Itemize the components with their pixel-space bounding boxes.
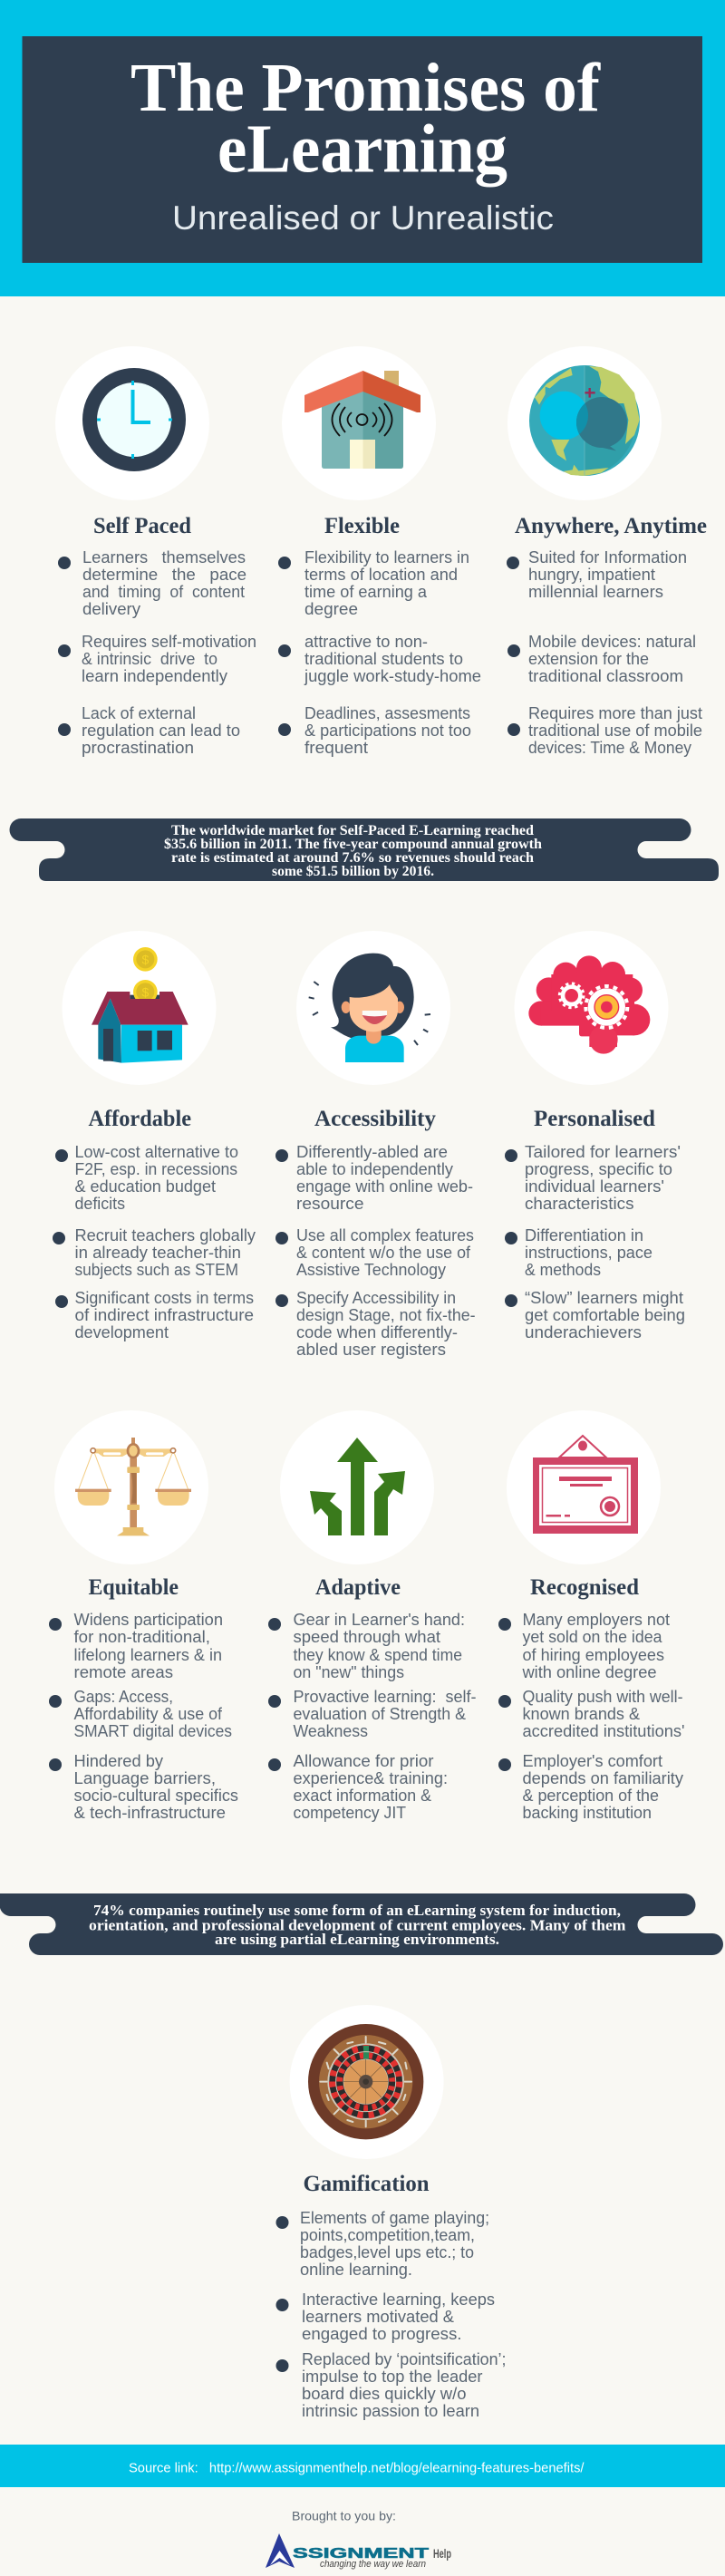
bullets: personalised: characteristics — [525, 1195, 634, 1213]
panel: accessibility — [276, 931, 475, 1359]
bullets: flexible: traditional students to — [304, 650, 463, 668]
bullets: self paced: & intrinsic drive to — [82, 650, 218, 668]
bullets: accessibility: & content w/o the use of — [296, 1244, 471, 1262]
heading: flexible: Flexible — [324, 514, 400, 538]
bullets: recognised: yet sold on the idea — [522, 1628, 662, 1646]
bullets: gamification: learners motivated & — [302, 2308, 454, 2326]
bullets: anywhere anytime: extension for the — [528, 650, 649, 668]
title panel — [22, 36, 702, 263]
heading: anywhere anytime: Anywhere, Anytime — [515, 514, 707, 538]
bullets: personalised — [505, 1143, 685, 1341]
bullets: accessibility: Use all complex features — [296, 1226, 474, 1244]
bullets: affordable: development — [74, 1323, 169, 1341]
icon: smiling woman — [296, 931, 450, 1085]
bullets: gamification: badges,level ups etc.; to — [300, 2243, 474, 2261]
bullets: equitable: Language barriers, — [74, 1769, 216, 1787]
icon: brain with gears — [515, 931, 669, 1085]
bullets: self paced: learn independently — [82, 667, 227, 685]
bullets: personalised: individual learners' — [525, 1177, 664, 1196]
bullets: personalised: instructions, pace — [525, 1244, 652, 1262]
bullets: adaptive: exact information & — [294, 1787, 431, 1805]
bullets: equitable: SMART digital devices — [74, 1722, 232, 1740]
bullets: affordable: subjects such as STEM — [74, 1261, 238, 1279]
bullets: affordable: in already teacher-thin — [74, 1244, 241, 1262]
bullets: gamification: Replaced by ‘pointsification’; — [302, 2350, 506, 2368]
credit text: Brought to you by: — [292, 2509, 396, 2523]
heading: accessibility: Accessibility — [314, 1107, 436, 1131]
bullets: gamification: engaged to progress. — [302, 2325, 462, 2343]
bullets: adaptive: Weakness — [294, 1722, 368, 1740]
bullets: recognised: accredited institutions' — [522, 1722, 685, 1740]
heading: self paced: Self Paced — [93, 514, 191, 538]
bullets: equitable: Hindered by — [74, 1752, 163, 1770]
bullets: affordable: of indirect infrastructure — [74, 1306, 254, 1324]
bullets: accessibility: able to independently — [296, 1160, 453, 1178]
icon: balance scales — [54, 1410, 208, 1564]
bullets: affordable — [53, 1143, 256, 1341]
callout banner: company usage: 74% companies routinely use some form of an eLearning system for induction, — [93, 1902, 621, 1919]
bullets: adaptive: competency JIT — [294, 1804, 406, 1822]
callout banner: market figures — [9, 818, 719, 881]
callout banner: company usage: are using partial eLearning environments. — [215, 1931, 499, 1948]
bullets: self paced: and timing of content — [82, 583, 245, 601]
logo: assignment help — [266, 2533, 451, 2570]
icon: three green arrows — [280, 1410, 434, 1564]
bullets: accessibility: Differently-abled are — [296, 1143, 448, 1161]
bullets: self paced: Requires self-motivation — [82, 633, 256, 651]
bullets: recognised: backing institution — [522, 1804, 652, 1822]
callout banner: market figures: rate is estimated at around 7.6% so revenues should reach — [171, 850, 534, 866]
panel: recognised — [498, 1410, 685, 1822]
panel: gamification — [276, 2005, 506, 2420]
bullets: recognised: Many employers not — [522, 1611, 670, 1629]
bullets: recognised: known brands & — [522, 1705, 640, 1723]
panel: equitable — [49, 1410, 238, 1822]
bullets: gamification — [276, 2209, 506, 2420]
bullets: self paced: Learners themselves — [82, 548, 246, 567]
bullets: equitable: remote areas — [74, 1663, 173, 1681]
bullets: affordable: deficits — [74, 1195, 125, 1213]
bullets: gamification: intrinsic passion to learn — [302, 2402, 479, 2420]
heading: equitable: Equitable — [89, 1575, 179, 1600]
bullets: recognised — [498, 1611, 685, 1822]
bullets: personalised: “Slow” learners might — [525, 1289, 683, 1307]
bullets: self paced: delivery — [82, 600, 140, 618]
bullets: anywhere anytime: Mobile devices: natural — [528, 633, 696, 651]
bullets: accessibility — [276, 1143, 475, 1359]
bullets: equitable: Affordability & use of — [74, 1705, 223, 1723]
bullets: affordable: Recruit teachers globally — [74, 1226, 256, 1244]
bullets: recognised: Quality push with well- — [522, 1688, 683, 1706]
bullets: flexible: time of earning a — [304, 583, 428, 601]
bullets: accessibility: code when differently- — [296, 1323, 458, 1341]
icon: piggy bank house with coins — [62, 931, 216, 1085]
bullets: recognised: of hiring employees — [522, 1646, 664, 1664]
bullets: flexible: degree — [304, 600, 358, 618]
bullets: adaptive: on "new" things — [294, 1663, 404, 1681]
bullets: accessibility: abled user registers — [296, 1341, 446, 1359]
bullets: self paced: determine the pace — [82, 566, 246, 584]
title: eLearning — [218, 111, 508, 187]
bullets: accessibility: Specify Accessibility in — [296, 1289, 456, 1307]
heading: recognised: Recognised — [530, 1575, 639, 1600]
bullets: anywhere anytime: traditional classroom — [528, 667, 683, 685]
bullets: flexible: Deadlines, assesments — [304, 704, 470, 722]
heading: gamification: Gamification — [303, 2172, 430, 2196]
bullets: personalised: & methods — [525, 1261, 601, 1279]
bullets: equitable — [49, 1611, 238, 1822]
bullets: personalised: progress, specific to — [525, 1160, 672, 1178]
bullets: flexible: juggle work-study-home — [304, 667, 481, 685]
header band — [0, 0, 725, 296]
bullets: gamification: board dies quickly w/o — [302, 2385, 466, 2403]
bullets: adaptive: Allowance for prior — [294, 1752, 434, 1770]
title: The Promises of — [130, 50, 602, 126]
callout banner: market figures: $35.6 billion in 2011. The five-year compound annual growth — [164, 837, 542, 852]
icon: roulette wheel — [290, 2005, 444, 2159]
bullets: accessibility: resource — [296, 1195, 364, 1213]
icon: piggy bank house with coins: $ — [141, 952, 149, 966]
bullets: adaptive: evaluation of Strength & — [294, 1705, 466, 1723]
bullets: gamification: online learning. — [300, 2261, 412, 2279]
bullets: recognised: & perception of the — [522, 1787, 659, 1805]
bullets: personalised: Differentiation in — [525, 1226, 643, 1244]
icon: clock — [55, 346, 209, 500]
bullets: adaptive: Provactive learning: self- — [294, 1688, 477, 1706]
bullets: flexible: frequent — [304, 739, 368, 757]
bullets: anywhere anytime — [507, 548, 702, 757]
bullets: recognised: depends on familiarity — [522, 1769, 683, 1787]
bullets: gamification: impulse to top the leader — [302, 2368, 483, 2386]
bullets: equitable: Gaps: Access, — [74, 1688, 173, 1706]
bullets: equitable: for non-traditional, — [74, 1628, 210, 1646]
bullets: accessibility: Assistive Technology — [296, 1261, 446, 1279]
bullets: recognised: Employer's comfort — [522, 1752, 662, 1770]
bullets: anywhere anytime: millennial learners — [528, 583, 663, 601]
bullets: accessibility: design Stage, not fix-the- — [296, 1306, 475, 1324]
callout banner: company usage — [0, 1893, 723, 1955]
bullets: flexible: terms of location and — [304, 566, 458, 584]
panel: personalised — [505, 931, 685, 1341]
bullets: self paced: regulation can lead to — [82, 721, 240, 740]
bullets: adaptive — [268, 1611, 477, 1822]
bullets: personalised: Tailored for learners' — [525, 1143, 681, 1161]
panel: affordable — [53, 931, 256, 1341]
callout banner: market figures: some $51.5 billion by 2016. — [272, 864, 434, 879]
bullets: equitable: socio-cultural specifics — [74, 1787, 238, 1805]
bullets: adaptive: experience& training: — [294, 1769, 448, 1787]
bullets: self paced: Lack of external — [82, 704, 196, 722]
panel: adaptive — [268, 1410, 477, 1822]
bullets: anywhere anytime: devices: Time & Money — [528, 739, 691, 757]
logo: assignment help: changing the way we learn — [320, 2559, 426, 2570]
bullets: gamification: points,competition,team, — [300, 2226, 475, 2244]
source link bar — [0, 2445, 725, 2487]
logo: assignment help: SSIGNMENT — [293, 2546, 429, 2561]
panel: anywhere anytime — [507, 346, 707, 757]
bullets: affordable: F2F, esp. in recessions — [74, 1160, 237, 1178]
bullets: personalised: underachievers — [525, 1323, 642, 1341]
bullets: flexible: Flexibility to learners in — [304, 548, 469, 567]
bullets: self paced: procrastination — [82, 739, 194, 757]
heading: personalised: Personalised — [534, 1107, 655, 1131]
bullets: adaptive: speed through what — [294, 1628, 440, 1646]
bullets: personalised: get comfortable being — [525, 1306, 685, 1324]
bullets: equitable: lifelong learners & in — [74, 1646, 222, 1664]
bullets: accessibility: engage with online web- — [296, 1177, 473, 1196]
bullets: anywhere anytime: Requires more than just — [528, 704, 702, 722]
bullets: gamification: Interactive learning, keeps — [302, 2290, 495, 2309]
icon: globe with speech bubbles — [508, 346, 662, 500]
icon: piggy bank house with coins: $ — [141, 984, 149, 999]
bullets: gamification: Elements of game playing; — [300, 2209, 489, 2227]
bullets: affordable: Low-cost alternative to — [74, 1143, 238, 1161]
panel: flexible — [278, 346, 481, 757]
bullets: equitable: & tech-infrastructure — [74, 1804, 226, 1822]
bullets: self paced — [58, 548, 256, 757]
bullets: flexible: & participations not too — [304, 721, 471, 740]
bullets: adaptive: Gear in Learner's hand: — [294, 1611, 465, 1629]
logo: assignment help: Help — [433, 2546, 451, 2561]
panel: self paced — [55, 346, 256, 757]
icon: framed certificate — [507, 1410, 661, 1564]
bullets: flexible — [278, 548, 481, 757]
bullets: anywhere anytime: traditional use of mobile — [528, 721, 702, 740]
title — [130, 50, 602, 187]
bullets: equitable: Widens participation — [74, 1611, 223, 1629]
icon: wifi house — [282, 346, 436, 500]
heading: affordable: Affordable — [89, 1107, 191, 1131]
bullets: flexible: attractive to non- — [304, 633, 428, 651]
bullets: anywhere anytime: hungry, impatient — [528, 566, 655, 584]
bullets: anywhere anytime: Suited for Information — [528, 548, 687, 567]
heading: adaptive: Adaptive — [315, 1575, 401, 1600]
subtitle: Unrealised or Unrealistic — [172, 199, 554, 237]
bullets: affordable: Significant costs in terms — [74, 1289, 254, 1307]
source link bar: Source link: http://www.assignmenthelp.net/blog/elearning-features-benefits/ — [129, 2460, 585, 2476]
callout banner: company usage: orientation, and professional development of current employees. Many of them — [89, 1916, 625, 1934]
callout banner: market figures: The worldwide market for Self-Paced E-Learning reached — [171, 823, 534, 838]
bullets: recognised: with online degree — [521, 1663, 656, 1681]
bullets: affordable: & education budget — [74, 1177, 216, 1196]
bullets: adaptive: they know & spend time — [294, 1646, 462, 1664]
